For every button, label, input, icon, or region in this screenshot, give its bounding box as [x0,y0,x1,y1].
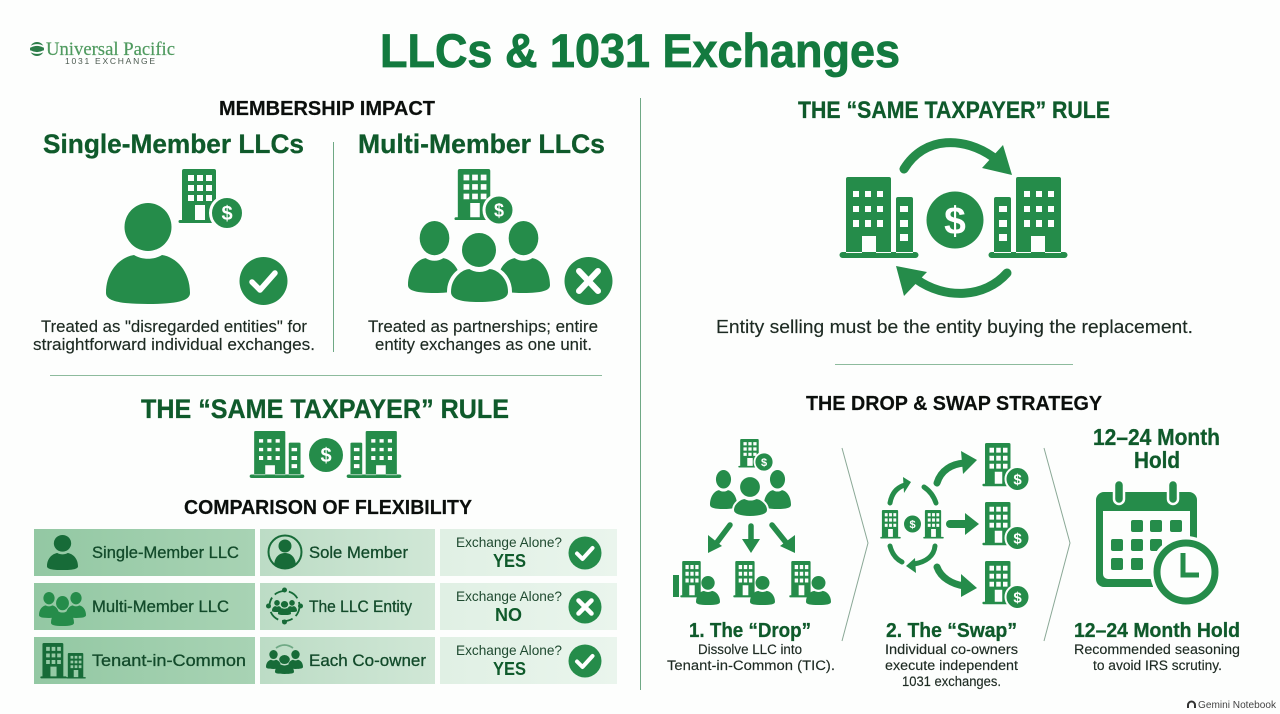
logo: Universal Pacific 1031 Exchange [30,39,175,66]
icon: buildings exchanged through dollar with cycle arrows [840,143,1068,296]
heading: same taxpayer rule: THE “SAME TAXPAYER” RULE [798,97,1110,124]
step 2: the swap icon [880,443,1030,609]
table row: single-member LLC: Exchange Alone? [456,534,562,550]
table row: tenant-in-common: Tenant-in-Common [92,651,246,670]
icon: buildings and dollar: $ [320,445,332,467]
step 1: the drop icon: $ [761,457,767,469]
logo: Universal Pacific 1031 Exchange: Universal Pacific [46,39,175,60]
icon: single owner with building: $ [221,203,233,225]
step 2: the swap text: Individual co-owners [885,642,1018,657]
heading: same taxpayer rule: THE “SAME TAXPAYER” RULE [141,394,509,424]
icon: buildings exchanged through dollar with cycle arrows: $ [944,200,966,243]
table row: multi-member LLC: NO [495,604,522,625]
heading: single-member LLCs: Single-Member LLCs [43,129,304,159]
step 2: the swap text [885,619,1018,689]
table row: tenant-in-common: Exchange Alone? [456,642,562,658]
panel: comparison of flexibility [34,496,617,684]
icon: cross mark [564,257,612,305]
table row: single-member LLC: Single-Member LLC [92,543,239,562]
icon: check mark [240,257,288,305]
text: single-member description [33,318,315,354]
heading: membership impact: MEMBERSHIP IMPACT [219,98,435,120]
icon: group of members with building [408,169,550,304]
step 2: the swap text: execute independent [885,658,1018,673]
watermark: Gemini Notebook: Gemini Notebook [1198,700,1277,711]
logo: Universal Pacific 1031 Exchange: 1031 EXCHANGE [65,56,155,66]
step 1: the drop text: Dissolve LLC into [698,642,802,657]
step 1: the drop text: Tenant-in-Common (TIC). [667,658,835,673]
chevron divider 2 [1044,448,1070,641]
text: multi-member description [368,318,598,354]
table row: tenant-in-common [34,637,617,684]
table row: single-member LLC: YES [493,550,526,571]
step 2: the swap icon: $ [1013,530,1022,548]
table row: multi-member LLC: Multi-Member LLC [92,597,229,616]
step 1: the drop text: 1. The “Drop” [689,619,811,642]
text: single-member description: Treated as "disregarded entities" for [41,318,308,336]
step 3: hold text [1074,619,1240,673]
step 1: the drop icon [673,439,831,605]
step 3: hold heading: 12–24 Month [1093,424,1220,450]
step 2: the swap icon: $ [1013,472,1022,488]
panel: same taxpayer rule (right) [716,97,1193,337]
panel: membership impact [33,98,612,354]
table row: tenant-in-common: Each Co-owner [309,651,426,670]
step 2: the swap icon: $ [1013,590,1022,606]
heading: comparison of flexibility: COMPARISON OF FLEXIBILITY [184,496,472,519]
icon: calendar with clock [1096,480,1222,608]
step 3: hold heading [1093,424,1220,473]
panel: drop and swap strategy [667,392,1240,689]
table row: single-member LLC: Sole Member [309,543,408,562]
chevron divider 1 [842,448,868,641]
step 3: hold text: to avoid IRS scrutiny. [1093,658,1222,673]
step 2: the swap icon: $ [909,519,916,531]
text: multi-member description: entity exchanges as one unit. [375,336,592,354]
text: multi-member description: Treated as partnerships; entire [368,318,598,336]
center divider [640,98,642,690]
step 2: the swap text: 1031 exchanges. [902,674,1001,689]
text: entity rule: Entity selling must be the entity buying the replacement. [716,316,1193,337]
step 2: the swap text: 2. The “Swap” [886,619,1017,642]
panel: same taxpayer rule (left) [141,394,509,478]
heading: drop and swap: THE DROP & SWAP STRATEGY [806,392,1102,415]
table row: tenant-in-common: YES [493,658,526,679]
table row: multi-member LLC: Exchange Alone? [456,588,562,604]
step 1: the drop text [667,619,835,673]
title: LLCs & 1031 Exchanges [380,24,900,77]
table row: multi-member LLC [34,583,617,630]
step 3: hold text: Recommended seasoning [1074,642,1240,657]
icon: single owner with building [106,169,244,304]
step 3: hold text: 12–24 Month Hold [1074,619,1240,642]
step 3: hold heading: Hold [1134,447,1180,473]
table row: multi-member LLC: The LLC Entity [309,597,412,616]
icon: group of members with building: $ [494,200,504,220]
table row: single-member LLC [34,529,617,576]
text: single-member description: straightforward individual exchanges. [33,336,315,354]
heading: multi-member LLCs: Multi-Member LLCs [358,129,605,159]
icon: buildings and dollar [250,431,401,478]
